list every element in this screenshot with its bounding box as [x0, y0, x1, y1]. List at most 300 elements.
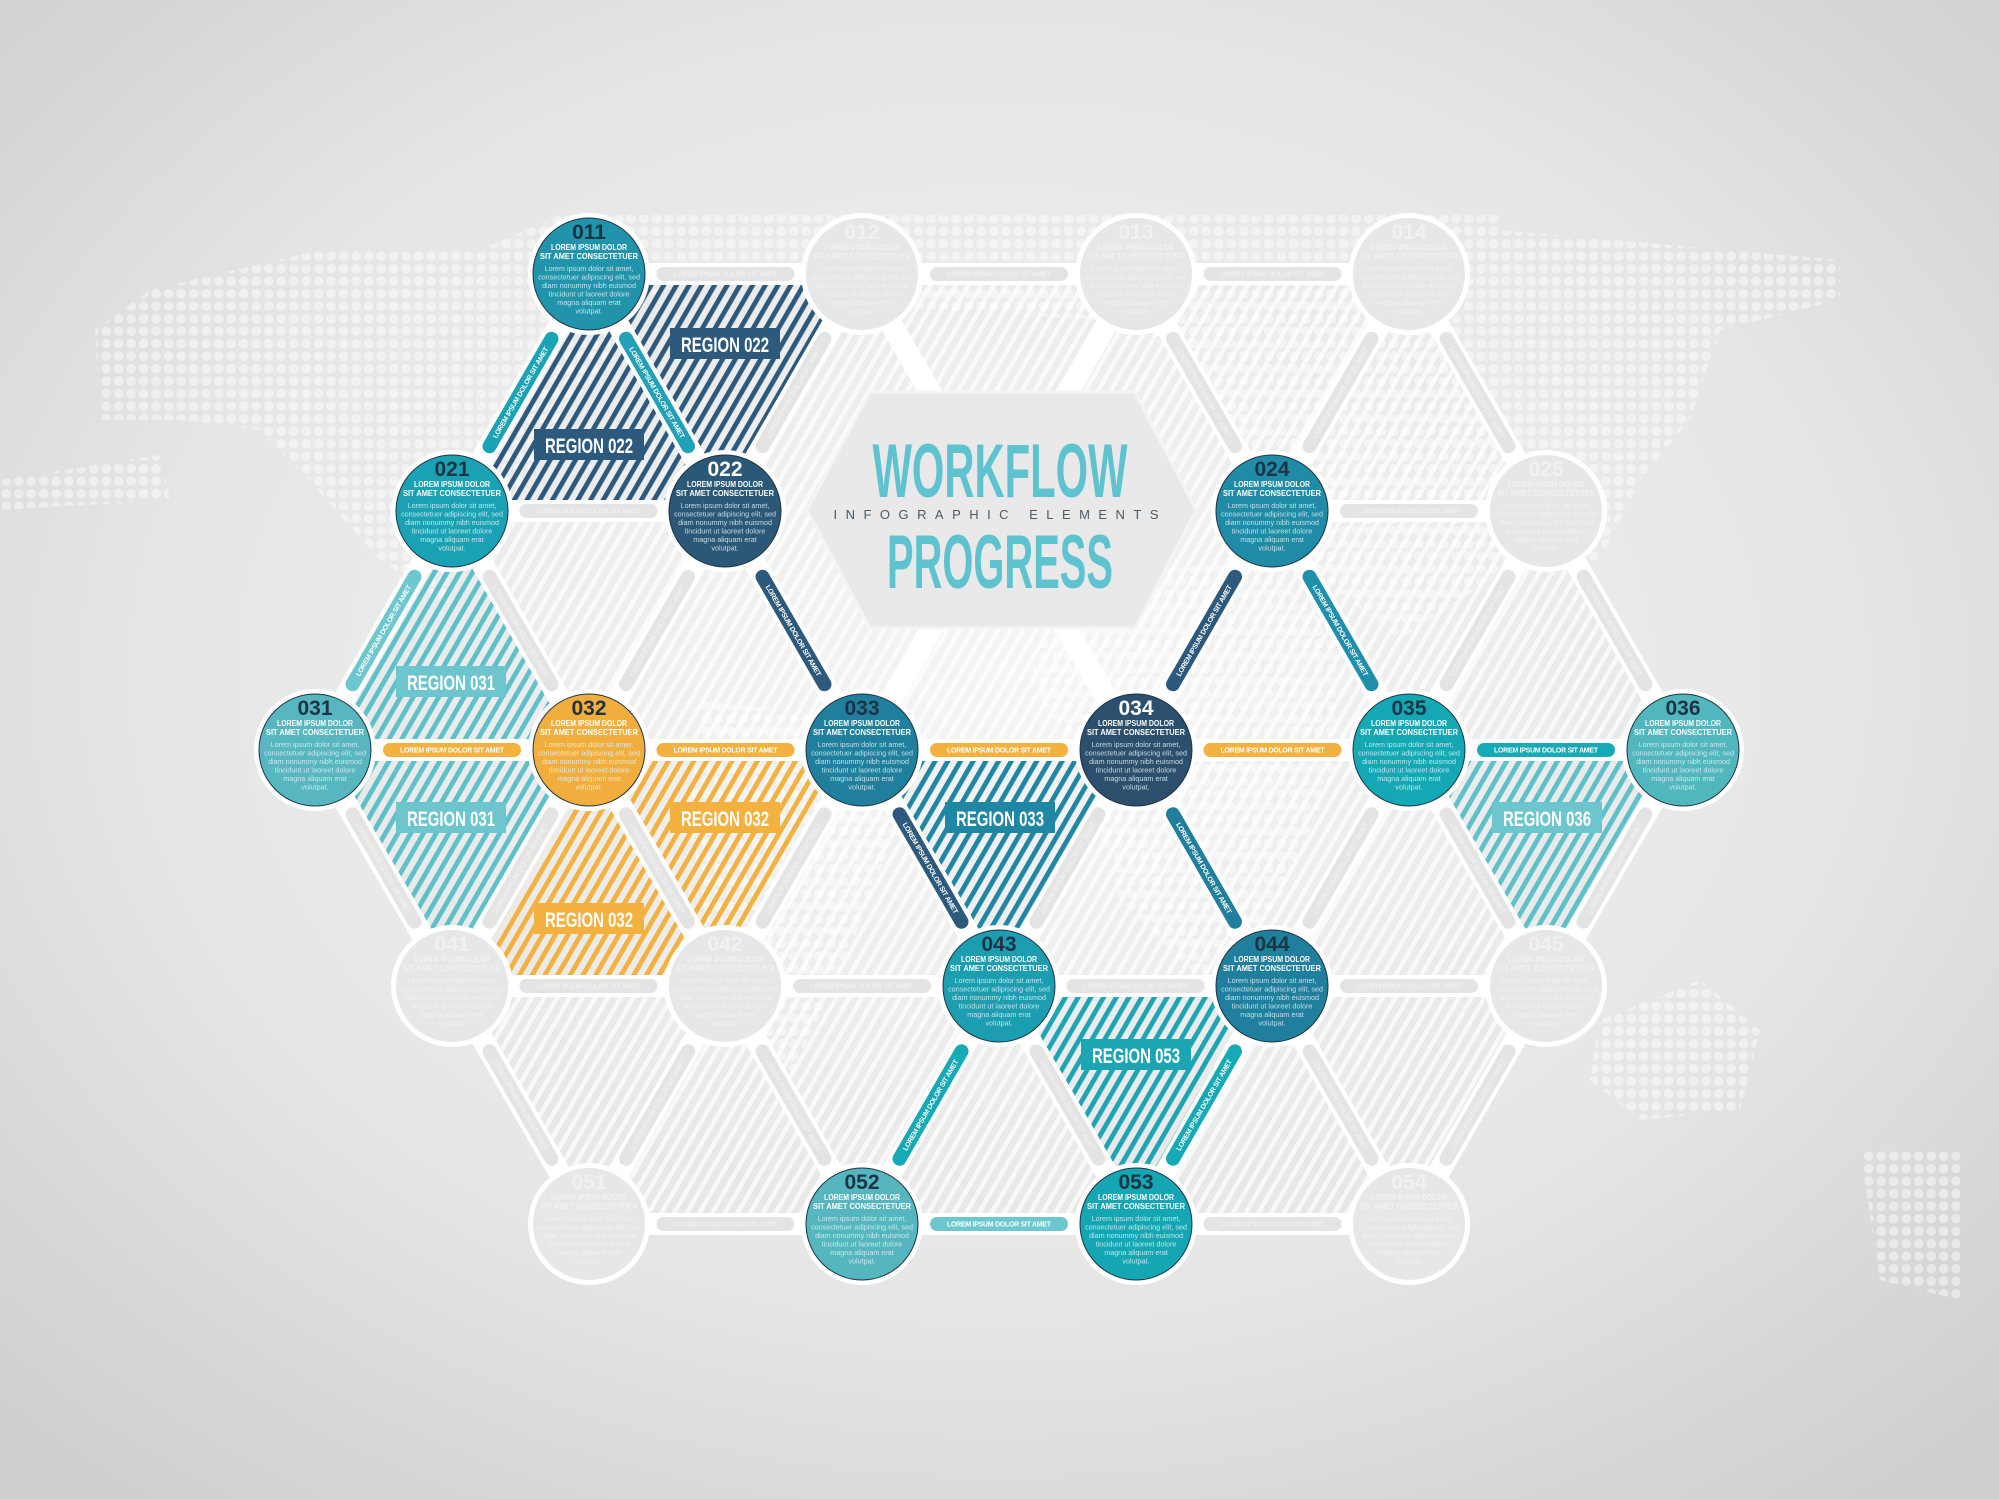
- node 041: LOREM IPSUM DOLOR: [414, 955, 490, 964]
- node 034: consectetuer adipiscing elit, sed: [1085, 748, 1187, 758]
- connector pills: LOREM IPSUM DOLOR SIT AMET: [1311, 1059, 1369, 1153]
- node 012: consectetuer adipiscing elit, sed: [811, 272, 913, 282]
- connector pills: LOREM IPSUM DOLOR SIT AMET: [674, 272, 778, 278]
- connector pills: LOREM IPSUM DOLOR SIT AMET: [536, 508, 641, 516]
- node 045: 045: [1528, 933, 1564, 956]
- node 051: consectetuer adipiscing elit, sed: [538, 1222, 640, 1232]
- node 044: volutpat.: [1258, 1018, 1286, 1028]
- region 032 hatched triangles: [452, 750, 862, 986]
- node 021: volutpat.: [438, 544, 466, 552]
- node 012: tincidunt ut laoreet dolore: [822, 290, 902, 298]
- region labels: [396, 328, 1602, 1070]
- node 032: tincidunt ut laoreet dolore: [549, 766, 629, 774]
- node 033: diam nonummy nibh euismod: [815, 757, 909, 766]
- node 053: 053: [1118, 1171, 1154, 1194]
- connector pills: LOREM IPSUM DOLOR SIT AMET: [1220, 748, 1325, 754]
- node 051: magna aliquam erat: [557, 1248, 621, 1257]
- node 025: [1485, 450, 1607, 572]
- node 045: LOREM IPSUM DOLOR: [1508, 955, 1584, 964]
- node 012: Lorem ipsum dolor sit amet,: [818, 264, 906, 273]
- node 042: magna aliquam erat: [693, 1010, 757, 1019]
- node 051: volutpat.: [575, 1256, 603, 1266]
- node 043: volutpat.: [985, 1018, 1013, 1028]
- node 013: tincidunt ut laoreet dolore: [1096, 290, 1176, 298]
- node 042: diam nonummy nibh euismod: [678, 993, 772, 1002]
- node 054: tincidunt ut laoreet dolore: [1369, 1240, 1449, 1248]
- node 012: volutpat.: [848, 306, 876, 316]
- node 014: SIT AMET CONSECTETUER: [1360, 252, 1458, 261]
- node 031: tincidunt ut laoreet dolore: [275, 766, 355, 774]
- node 013: Lorem ipsum dolor sit amet,: [1092, 264, 1180, 273]
- node 032: volutpat.: [575, 782, 603, 792]
- connector pills: LOREM IPSUM DOLOR SIT AMET: [674, 748, 778, 754]
- connector pills: LOREM IPSUM DOLOR SIT AMET: [627, 822, 686, 916]
- node 011: consectetuer adipiscing elit, sed: [538, 272, 640, 282]
- node 011: tincidunt ut laoreet dolore: [549, 290, 629, 298]
- connector pills: LOREM IPSUM DOLOR SIT AMET: [1038, 1059, 1096, 1153]
- node 024: consectetuer adipiscing elit, sed: [1221, 510, 1323, 518]
- node 042: 042: [707, 933, 743, 956]
- title: PROGRESS: PROGRESS: [887, 520, 1113, 605]
- region 053 hatched triangle: [999, 986, 1272, 1224]
- region 022 hatched triangles: [452, 274, 862, 511]
- node 051: [528, 1163, 650, 1285]
- region 031 hatched triangles: [315, 511, 589, 986]
- node 043: 043: [981, 933, 1017, 956]
- node 033: [801, 689, 923, 811]
- node 034: SIT AMET CONSECTETUER: [1087, 728, 1185, 737]
- node 044: SIT AMET CONSECTETUER: [1223, 964, 1321, 973]
- diagonals rows 2-3: [343, 567, 424, 694]
- node 022: Lorem ipsum dolor sit amet,: [681, 501, 769, 510]
- node 032: 032: [571, 697, 607, 720]
- node 014: 014: [1391, 221, 1427, 244]
- node 052: Lorem ipsum dolor sit amet,: [818, 1214, 906, 1223]
- connector pills: LOREM IPSUM DOLOR SIT AMET: [492, 821, 551, 915]
- connector pills: LOREM IPSUM DOLOR SIT AMET: [902, 1058, 961, 1152]
- node 045: diam nonummy nibh euismod: [1499, 993, 1593, 1002]
- connector pills: LOREM IPSUM DOLOR SIT AMET: [1220, 1222, 1325, 1228]
- node 044: Lorem ipsum dolor sit amet,: [1228, 976, 1316, 985]
- node 044: [1211, 925, 1333, 1047]
- node 051: diam nonummy nibh euismod: [542, 1231, 636, 1240]
- node 014: volutpat.: [1395, 306, 1423, 316]
- node 035: Lorem ipsum dolor sit amet,: [1365, 740, 1453, 749]
- connector pills: LOREM IPSUM DOLOR SIT AMET: [1311, 584, 1369, 678]
- connector pills: LOREM IPSUM DOLOR SIT AMET: [1448, 822, 1506, 916]
- node 021: 021: [434, 458, 470, 481]
- node 021: LOREM IPSUM DOLOR: [414, 480, 490, 489]
- node 051: tincidunt ut laoreet dolore: [549, 1240, 629, 1248]
- node 031: SIT AMET CONSECTETUER: [266, 728, 364, 737]
- node 054: magna aliquam erat: [1377, 1248, 1441, 1257]
- node 022: volutpat.: [711, 544, 739, 552]
- node 022: 022: [707, 458, 743, 481]
- node 043: [938, 925, 1060, 1047]
- node 045: magna aliquam erat: [1514, 1010, 1578, 1019]
- node 041: SIT AMET CONSECTETUER: [403, 964, 501, 973]
- node 035: SIT AMET CONSECTETUER: [1360, 728, 1458, 737]
- node 041: tincidunt ut laoreet dolore: [412, 1002, 492, 1010]
- subtitle: INFOGRAPHIC ELEMENTS: [834, 507, 1159, 522]
- node 024: magna aliquam erat: [1240, 535, 1304, 544]
- node 034: tincidunt ut laoreet dolore: [1096, 766, 1176, 774]
- node 043: consectetuer adipiscing elit, sed: [948, 984, 1050, 994]
- node 036: magna aliquam erat: [1651, 774, 1715, 783]
- node 022: tincidunt ut laoreet dolore: [685, 526, 765, 536]
- node 013: consectetuer adipiscing elit, sed: [1085, 272, 1187, 282]
- node 034: 034: [1118, 697, 1154, 720]
- node 025: LOREM IPSUM DOLOR: [1508, 480, 1584, 489]
- connector pills: LOREM IPSUM DOLOR SIT AMET: [1449, 1058, 1508, 1152]
- node 053: magna aliquam erat: [1104, 1248, 1168, 1257]
- node 024: Lorem ipsum dolor sit amet,: [1228, 501, 1316, 510]
- node 036: Lorem ipsum dolor sit amet,: [1639, 740, 1727, 749]
- node 054: diam nonummy nibh euismod: [1362, 1231, 1456, 1240]
- node 021: [391, 450, 513, 572]
- node 036: tincidunt ut laoreet dolore: [1643, 766, 1723, 774]
- node 024: SIT AMET CONSECTETUER: [1223, 489, 1321, 498]
- node 024: volutpat.: [1258, 544, 1286, 552]
- node 012: LOREM IPSUM DOLOR: [824, 243, 900, 252]
- connector pills: LOREM IPSUM DOLOR SIT AMET: [491, 584, 549, 678]
- node 036: LOREM IPSUM DOLOR: [1645, 719, 1721, 728]
- node 053: tincidunt ut laoreet dolore: [1096, 1240, 1176, 1248]
- node 034: magna aliquam erat: [1104, 774, 1168, 783]
- node 032: [528, 689, 650, 811]
- node 034: diam nonummy nibh euismod: [1089, 757, 1183, 766]
- node 052: consectetuer adipiscing elit, sed: [811, 1222, 913, 1232]
- node 045: tincidunt ut laoreet dolore: [1506, 1002, 1586, 1010]
- node 025: 025: [1528, 458, 1564, 481]
- node 054: [1348, 1163, 1470, 1285]
- background world map dots: [0, 215, 1960, 1300]
- diagonals rows 3-4: [343, 805, 424, 931]
- node 022: diam nonummy nibh euismod: [678, 518, 772, 527]
- node 036: consectetuer adipiscing elit, sed: [1632, 748, 1734, 758]
- node 052: volutpat.: [848, 1256, 876, 1266]
- node 032: LOREM IPSUM DOLOR: [551, 719, 627, 728]
- node 053: LOREM IPSUM DOLOR: [1098, 1193, 1174, 1202]
- connector pills: LOREM IPSUM DOLOR SIT AMET: [1586, 821, 1645, 915]
- node 034: Lorem ipsum dolor sit amet,: [1092, 740, 1180, 749]
- node 013: volutpat.: [1122, 306, 1150, 316]
- node 014: magna aliquam erat: [1377, 298, 1441, 307]
- node 052: 052: [844, 1171, 880, 1194]
- node 053: consectetuer adipiscing elit, sed: [1085, 1222, 1187, 1232]
- connector pills: LOREM IPSUM DOLOR SIT AMET: [765, 821, 824, 915]
- region labels: REGION 032: [681, 808, 769, 831]
- connector pills: LOREM IPSUM DOLOR SIT AMET: [1084, 984, 1188, 990]
- node 012: 012: [844, 221, 880, 244]
- node 035: [1348, 689, 1470, 811]
- node 032: magna aliquam erat: [557, 774, 621, 783]
- node 052: SIT AMET CONSECTETUER: [813, 1202, 911, 1211]
- node 011: volutpat.: [575, 306, 603, 316]
- connector pills: LOREM IPSUM DOLOR SIT AMET: [627, 346, 686, 440]
- lattice background hatch: [315, 274, 1683, 1224]
- connector pills: LOREM IPSUM DOLOR SIT AMET: [764, 584, 822, 678]
- region labels: REGION 032: [545, 909, 633, 932]
- node 034: [1075, 689, 1197, 811]
- node 033: magna aliquam erat: [830, 774, 894, 783]
- node 051: SIT AMET CONSECTETUER: [540, 1202, 638, 1211]
- region 033 hatched triangle: [862, 750, 1136, 986]
- node 024: diam nonummy nibh euismod: [1225, 518, 1319, 527]
- title hexagon: [807, 392, 1196, 628]
- node 036: diam nonummy nibh euismod: [1636, 757, 1730, 766]
- region labels: REGION 033: [956, 808, 1044, 831]
- node 051: Lorem ipsum dolor sit amet,: [545, 1214, 633, 1223]
- connector pills: LOREM IPSUM DOLOR SIT AMET: [1174, 822, 1233, 916]
- node 031: volutpat.: [301, 782, 329, 792]
- connector pills: LOREM IPSUM DOLOR SIT AMET: [1494, 748, 1599, 754]
- node 052: LOREM IPSUM DOLOR: [824, 1193, 900, 1202]
- node 035: diam nonummy nibh euismod: [1362, 757, 1456, 766]
- node 014: diam nonummy nibh euismod: [1362, 281, 1456, 290]
- node 031: diam nonummy nibh euismod: [268, 757, 362, 766]
- node 042: volutpat.: [711, 1018, 739, 1028]
- node 053: volutpat.: [1122, 1256, 1150, 1266]
- node 021: magna aliquam erat: [420, 535, 484, 544]
- connector pills: LOREM IPSUM DOLOR SIT AMET: [674, 1222, 778, 1228]
- connector pills: LOREM IPSUM DOLOR SIT AMET: [1039, 821, 1098, 915]
- node 042: tincidunt ut laoreet dolore: [685, 1002, 765, 1010]
- node 054: SIT AMET CONSECTETUER: [1360, 1202, 1458, 1211]
- node 053: diam nonummy nibh euismod: [1089, 1231, 1183, 1240]
- node 032: SIT AMET CONSECTETUER: [540, 728, 638, 737]
- node 024: [1211, 450, 1333, 572]
- white lattice lines: [315, 274, 1683, 1224]
- node 025: diam nonummy nibh euismod: [1499, 518, 1593, 527]
- node 051: LOREM IPSUM DOLOR: [551, 1193, 627, 1202]
- node 033: SIT AMET CONSECTETUER: [813, 728, 911, 737]
- node 052: tincidunt ut laoreet dolore: [822, 1240, 902, 1248]
- node 011: 011: [572, 221, 606, 244]
- connector pills: LOREM IPSUM DOLOR SIT AMET: [765, 346, 824, 440]
- node 052: diam nonummy nibh euismod: [815, 1231, 909, 1240]
- node 032: Lorem ipsum dolor sit amet,: [545, 740, 633, 749]
- node 044: magna aliquam erat: [1240, 1010, 1304, 1019]
- connector pills: LOREM IPSUM DOLOR SIT AMET: [1312, 821, 1371, 915]
- connector pills: LOREM IPSUM DOLOR SIT AMET: [810, 984, 915, 990]
- node 033: tincidunt ut laoreet dolore: [822, 766, 902, 774]
- connector pills: LOREM IPSUM DOLOR SIT AMET: [1312, 346, 1371, 440]
- connector pills: LOREM IPSUM DOLOR SIT AMET: [1357, 508, 1462, 516]
- node 045: [1485, 925, 1607, 1047]
- node 033: Lorem ipsum dolor sit amet,: [818, 740, 906, 749]
- node 044: LOREM IPSUM DOLOR: [1234, 955, 1310, 964]
- node 036: 036: [1665, 697, 1701, 720]
- node 013: LOREM IPSUM DOLOR: [1098, 243, 1174, 252]
- node 031: LOREM IPSUM DOLOR: [277, 719, 353, 728]
- node 025: tincidunt ut laoreet dolore: [1506, 526, 1586, 536]
- node 012: diam nonummy nibh euismod: [815, 281, 909, 290]
- connector pills: LOREM IPSUM DOLOR SIT AMET: [947, 1222, 1052, 1228]
- node 042: consectetuer adipiscing elit, sed: [674, 984, 776, 994]
- connector pills: LOREM IPSUM DOLOR SIT AMET: [629, 1058, 687, 1152]
- node 041: volutpat.: [438, 1018, 466, 1028]
- node 014: LOREM IPSUM DOLOR: [1371, 243, 1447, 252]
- connector pills: LOREM IPSUM DOLOR SIT AMET: [1220, 272, 1325, 278]
- diagonals rows 2-3: LOREM IPSUM DOLOR SIT AMET: [355, 584, 414, 678]
- node 025: magna aliquam erat: [1514, 535, 1578, 544]
- connector pills: LOREM IPSUM DOLOR SIT AMET: [1585, 584, 1643, 678]
- node 035: magna aliquam erat: [1377, 774, 1441, 783]
- region labels: REGION 036: [1503, 808, 1591, 831]
- node 045: Lorem ipsum dolor sit amet,: [1502, 976, 1590, 985]
- node 014: Lorem ipsum dolor sit amet,: [1365, 264, 1453, 273]
- node 054: LOREM IPSUM DOLOR: [1371, 1193, 1447, 1202]
- diagonals rows 3-4: LOREM IPSUM DOLOR SIT AMET: [354, 822, 412, 916]
- diagonals rows 1-2: [480, 329, 561, 456]
- node 052: [801, 1163, 923, 1285]
- node 032: consectetuer adipiscing elit, sed: [538, 748, 640, 758]
- node 043: Lorem ipsum dolor sit amet,: [955, 976, 1043, 985]
- node 022: SIT AMET CONSECTETUER: [676, 489, 774, 498]
- node 036: SIT AMET CONSECTETUER: [1634, 728, 1732, 737]
- node 011: [528, 213, 650, 335]
- node 036: [1622, 689, 1744, 811]
- node 021: diam nonummy nibh euismod: [405, 518, 499, 527]
- node 031: [254, 689, 376, 811]
- node 011: LOREM IPSUM DOLOR: [551, 243, 627, 252]
- node 043: SIT AMET CONSECTETUER: [950, 964, 1048, 973]
- node 035: volutpat.: [1395, 782, 1423, 792]
- node 041: magna aliquam erat: [420, 1010, 484, 1019]
- node 013: SIT AMET CONSECTETUER: [1087, 252, 1185, 261]
- connector pills: LOREM IPSUM DOLOR SIT AMET: [1176, 1058, 1234, 1152]
- node 044: diam nonummy nibh euismod: [1225, 993, 1319, 1002]
- node 051: 051: [571, 1171, 607, 1194]
- node 033: 033: [844, 697, 880, 720]
- node 041: Lorem ipsum dolor sit amet,: [408, 976, 496, 985]
- node 013: diam nonummy nibh euismod: [1089, 281, 1183, 290]
- node 043: LOREM IPSUM DOLOR: [961, 955, 1037, 964]
- node 013: magna aliquam erat: [1104, 298, 1168, 307]
- node 045: SIT AMET CONSECTETUER: [1497, 964, 1595, 973]
- node 035: tincidunt ut laoreet dolore: [1369, 766, 1449, 774]
- node 044: consectetuer adipiscing elit, sed: [1221, 984, 1323, 994]
- node 053: SIT AMET CONSECTETUER: [1087, 1202, 1185, 1211]
- node 045: volutpat.: [1532, 1018, 1560, 1028]
- node 053: Lorem ipsum dolor sit amet,: [1092, 1214, 1180, 1223]
- connector pills: LOREM IPSUM DOLOR SIT AMET: [1357, 984, 1462, 990]
- region labels: REGION 022: [545, 435, 633, 458]
- node 025: consectetuer adipiscing elit, sed: [1495, 510, 1597, 518]
- nodes: [254, 213, 1744, 1285]
- node 032: diam nonummy nibh euismod: [542, 757, 636, 766]
- node 014: [1348, 213, 1470, 335]
- node 024: tincidunt ut laoreet dolore: [1232, 526, 1312, 536]
- region labels: REGION 053: [1092, 1045, 1180, 1068]
- node 021: consectetuer adipiscing elit, sed: [401, 510, 503, 518]
- node 031: 031: [297, 697, 333, 720]
- node 035: consectetuer adipiscing elit, sed: [1358, 748, 1460, 758]
- connector pills: LOREM IPSUM DOLOR SIT AMET: [1448, 346, 1506, 440]
- node 053: [1075, 1163, 1197, 1285]
- node 011: Lorem ipsum dolor sit amet,: [545, 264, 633, 273]
- node 044: 044: [1254, 933, 1290, 956]
- node 022: [664, 450, 786, 572]
- connector pills: LOREM IPSUM DOLOR SIT AMET: [1176, 584, 1234, 678]
- region labels: REGION 031: [407, 672, 495, 695]
- node 021: Lorem ipsum dolor sit amet,: [408, 501, 496, 510]
- node 043: tincidunt ut laoreet dolore: [959, 1002, 1039, 1010]
- node 033: LOREM IPSUM DOLOR: [824, 719, 900, 728]
- node 011: magna aliquam erat: [557, 298, 621, 307]
- diagonals rows 4-5: LOREM IPSUM DOLOR SIT AMET: [491, 1059, 549, 1153]
- node 043: magna aliquam erat: [967, 1010, 1031, 1019]
- node 054: consectetuer adipiscing elit, sed: [1358, 1222, 1460, 1232]
- connector pills: LOREM IPSUM DOLOR SIT AMET: [901, 822, 959, 916]
- node 054: 054: [1391, 1171, 1427, 1194]
- node 031: consectetuer adipiscing elit, sed: [264, 748, 366, 758]
- node 014: consectetuer adipiscing elit, sed: [1358, 272, 1460, 282]
- node 021: SIT AMET CONSECTETUER: [403, 489, 501, 498]
- connector pills: LOREM IPSUM DOLOR SIT AMET: [400, 748, 505, 754]
- node 054: volutpat.: [1395, 1256, 1423, 1266]
- region labels: REGION 022: [681, 334, 769, 357]
- node 013: [1075, 213, 1197, 335]
- node 024: 024: [1254, 458, 1290, 481]
- node 011: SIT AMET CONSECTETUER: [540, 252, 638, 261]
- node 043: diam nonummy nibh euismod: [952, 993, 1046, 1002]
- node 044: tincidunt ut laoreet dolore: [1232, 1002, 1312, 1010]
- node 042: Lorem ipsum dolor sit amet,: [681, 976, 769, 985]
- connector pills: LOREM IPSUM DOLOR SIT AMET: [947, 272, 1052, 278]
- node 025: volutpat.: [1532, 544, 1560, 552]
- node 033: consectetuer adipiscing elit, sed: [811, 748, 913, 758]
- node 022: magna aliquam erat: [693, 535, 757, 544]
- node 041: consectetuer adipiscing elit, sed: [401, 984, 503, 994]
- diagonals rows 1-2: LOREM IPSUM DOLOR SIT AMET: [492, 346, 551, 440]
- node 036: volutpat.: [1669, 782, 1697, 792]
- node 054: Lorem ipsum dolor sit amet,: [1365, 1214, 1453, 1223]
- node 021: tincidunt ut laoreet dolore: [412, 526, 492, 536]
- connector pills: LOREM IPSUM DOLOR SIT AMET: [1174, 346, 1233, 440]
- region 036 hatched triangle: [1409, 750, 1683, 986]
- node 042: [664, 925, 786, 1047]
- connector pills: LOREM IPSUM DOLOR SIT AMET: [1449, 584, 1508, 678]
- node 024: LOREM IPSUM DOLOR: [1234, 480, 1310, 489]
- connector pills: LOREM IPSUM DOLOR SIT AMET: [764, 1059, 822, 1153]
- node 042: SIT AMET CONSECTETUER: [676, 964, 774, 973]
- node 041: 041: [434, 933, 470, 956]
- node 012: SIT AMET CONSECTETUER: [813, 252, 911, 261]
- node 041: diam nonummy nibh euismod: [405, 993, 499, 1002]
- node 033: volutpat.: [848, 782, 876, 792]
- node 035: 035: [1391, 697, 1427, 720]
- connector pills: LOREM IPSUM DOLOR SIT AMET: [947, 748, 1052, 754]
- node 031: Lorem ipsum dolor sit amet,: [271, 740, 359, 749]
- title: WORKFLOW: WORKFLOW: [872, 429, 1128, 514]
- node 012: [801, 213, 923, 335]
- node 012: magna aliquam erat: [830, 298, 894, 307]
- node 052: magna aliquam erat: [830, 1248, 894, 1257]
- node 041: [391, 925, 513, 1047]
- node 025: Lorem ipsum dolor sit amet,: [1502, 501, 1590, 510]
- node 011: diam nonummy nibh euismod: [542, 281, 636, 290]
- node 025: SIT AMET CONSECTETUER: [1497, 489, 1595, 498]
- connector pills: LOREM IPSUM DOLOR SIT AMET: [536, 984, 641, 990]
- node 022: consectetuer adipiscing elit, sed: [674, 510, 776, 518]
- node 031: magna aliquam erat: [283, 774, 347, 783]
- connector pills: [343, 267, 1655, 1231]
- node 034: LOREM IPSUM DOLOR: [1098, 719, 1174, 728]
- node 013: 013: [1118, 221, 1154, 244]
- node 045: consectetuer adipiscing elit, sed: [1495, 984, 1597, 994]
